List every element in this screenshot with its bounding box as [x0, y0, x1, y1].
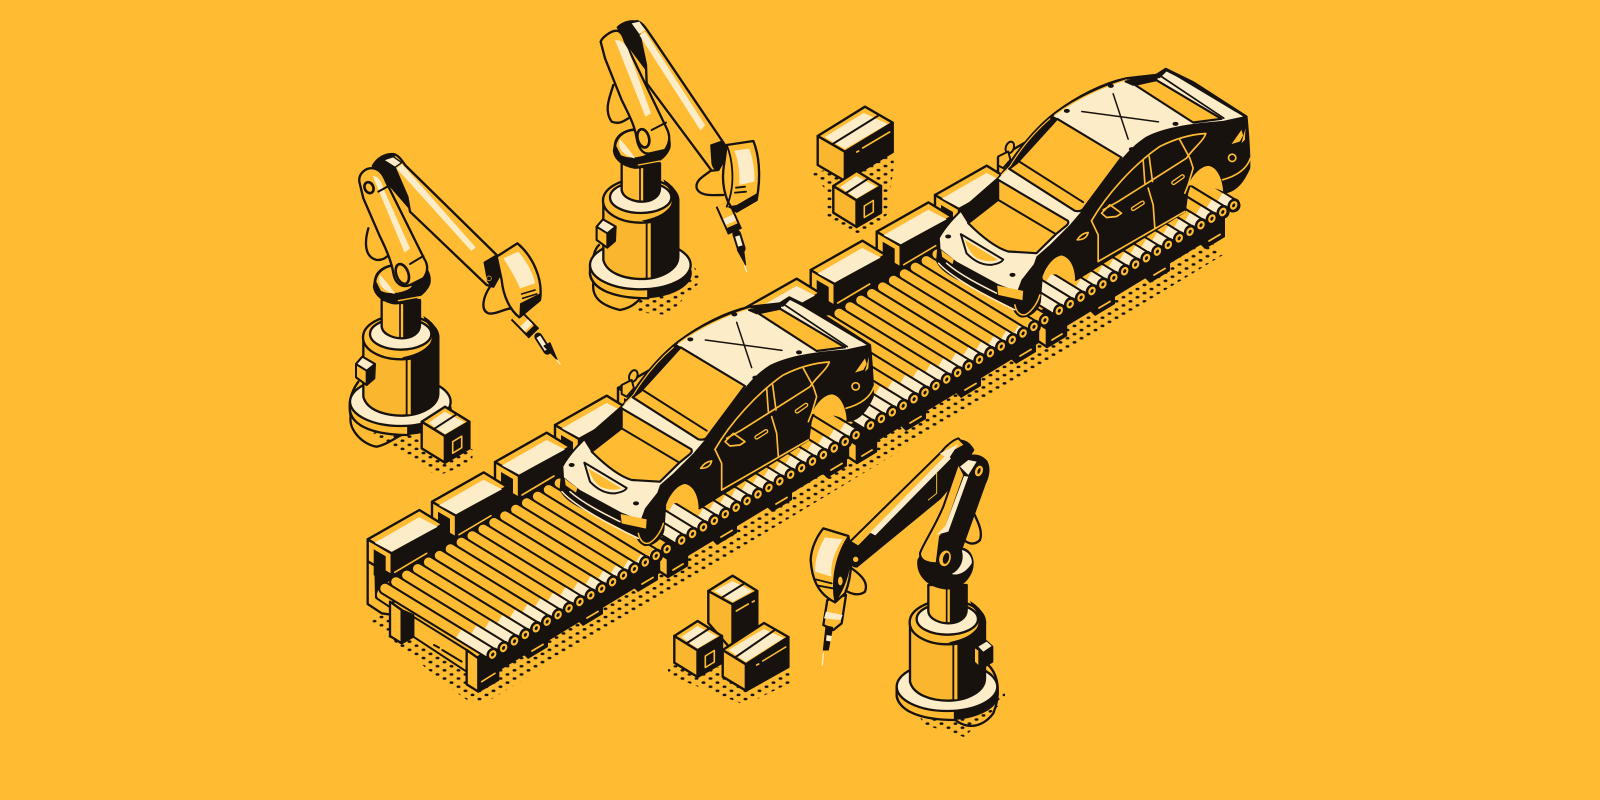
- conveyor rollers: section four: [952, 139, 1242, 320]
- box: top wide carton: [818, 107, 893, 181]
- conveyor rollers: section two: [574, 369, 865, 550]
- conveyor: support legs: [523, 222, 1225, 659]
- conveyor rollers: section three: [763, 254, 1054, 435]
- conveyor: back shadow mass: [385, 116, 1130, 600]
- conveyor: front rail: [477, 200, 1225, 672]
- conveyor rollers: section one: [385, 483, 676, 664]
- dotted shadow: bottom boxes: [668, 665, 792, 705]
- robot arm: top centre: [590, 21, 759, 310]
- dotted shadow: first robot arm: [373, 420, 473, 476]
- robot arm: bottom right: [811, 438, 998, 726]
- conveyor: left frame and rear leg: [368, 539, 467, 672]
- dotted shadow: second robot arm: [635, 264, 702, 315]
- car body: front of the line: [561, 297, 874, 545]
- box: top small carton: [833, 171, 881, 227]
- box: bottom tall carton: [708, 576, 757, 651]
- conveyor: front leg: [467, 643, 498, 692]
- robot arm: far left: [350, 154, 560, 447]
- box: bottom wide carton: [723, 623, 788, 691]
- conveyor: gantry blocks along the back rail: [368, 129, 1073, 581]
- box beside first robot: [422, 407, 469, 463]
- dotted shadow: top boxes: [812, 155, 894, 236]
- dotted shadow: conveyor: [371, 235, 1223, 702]
- dotted shadow: third robot arm: [918, 692, 1005, 737]
- box: bottom small carton: [674, 621, 722, 677]
- car body: rear of the line: [937, 69, 1250, 316]
